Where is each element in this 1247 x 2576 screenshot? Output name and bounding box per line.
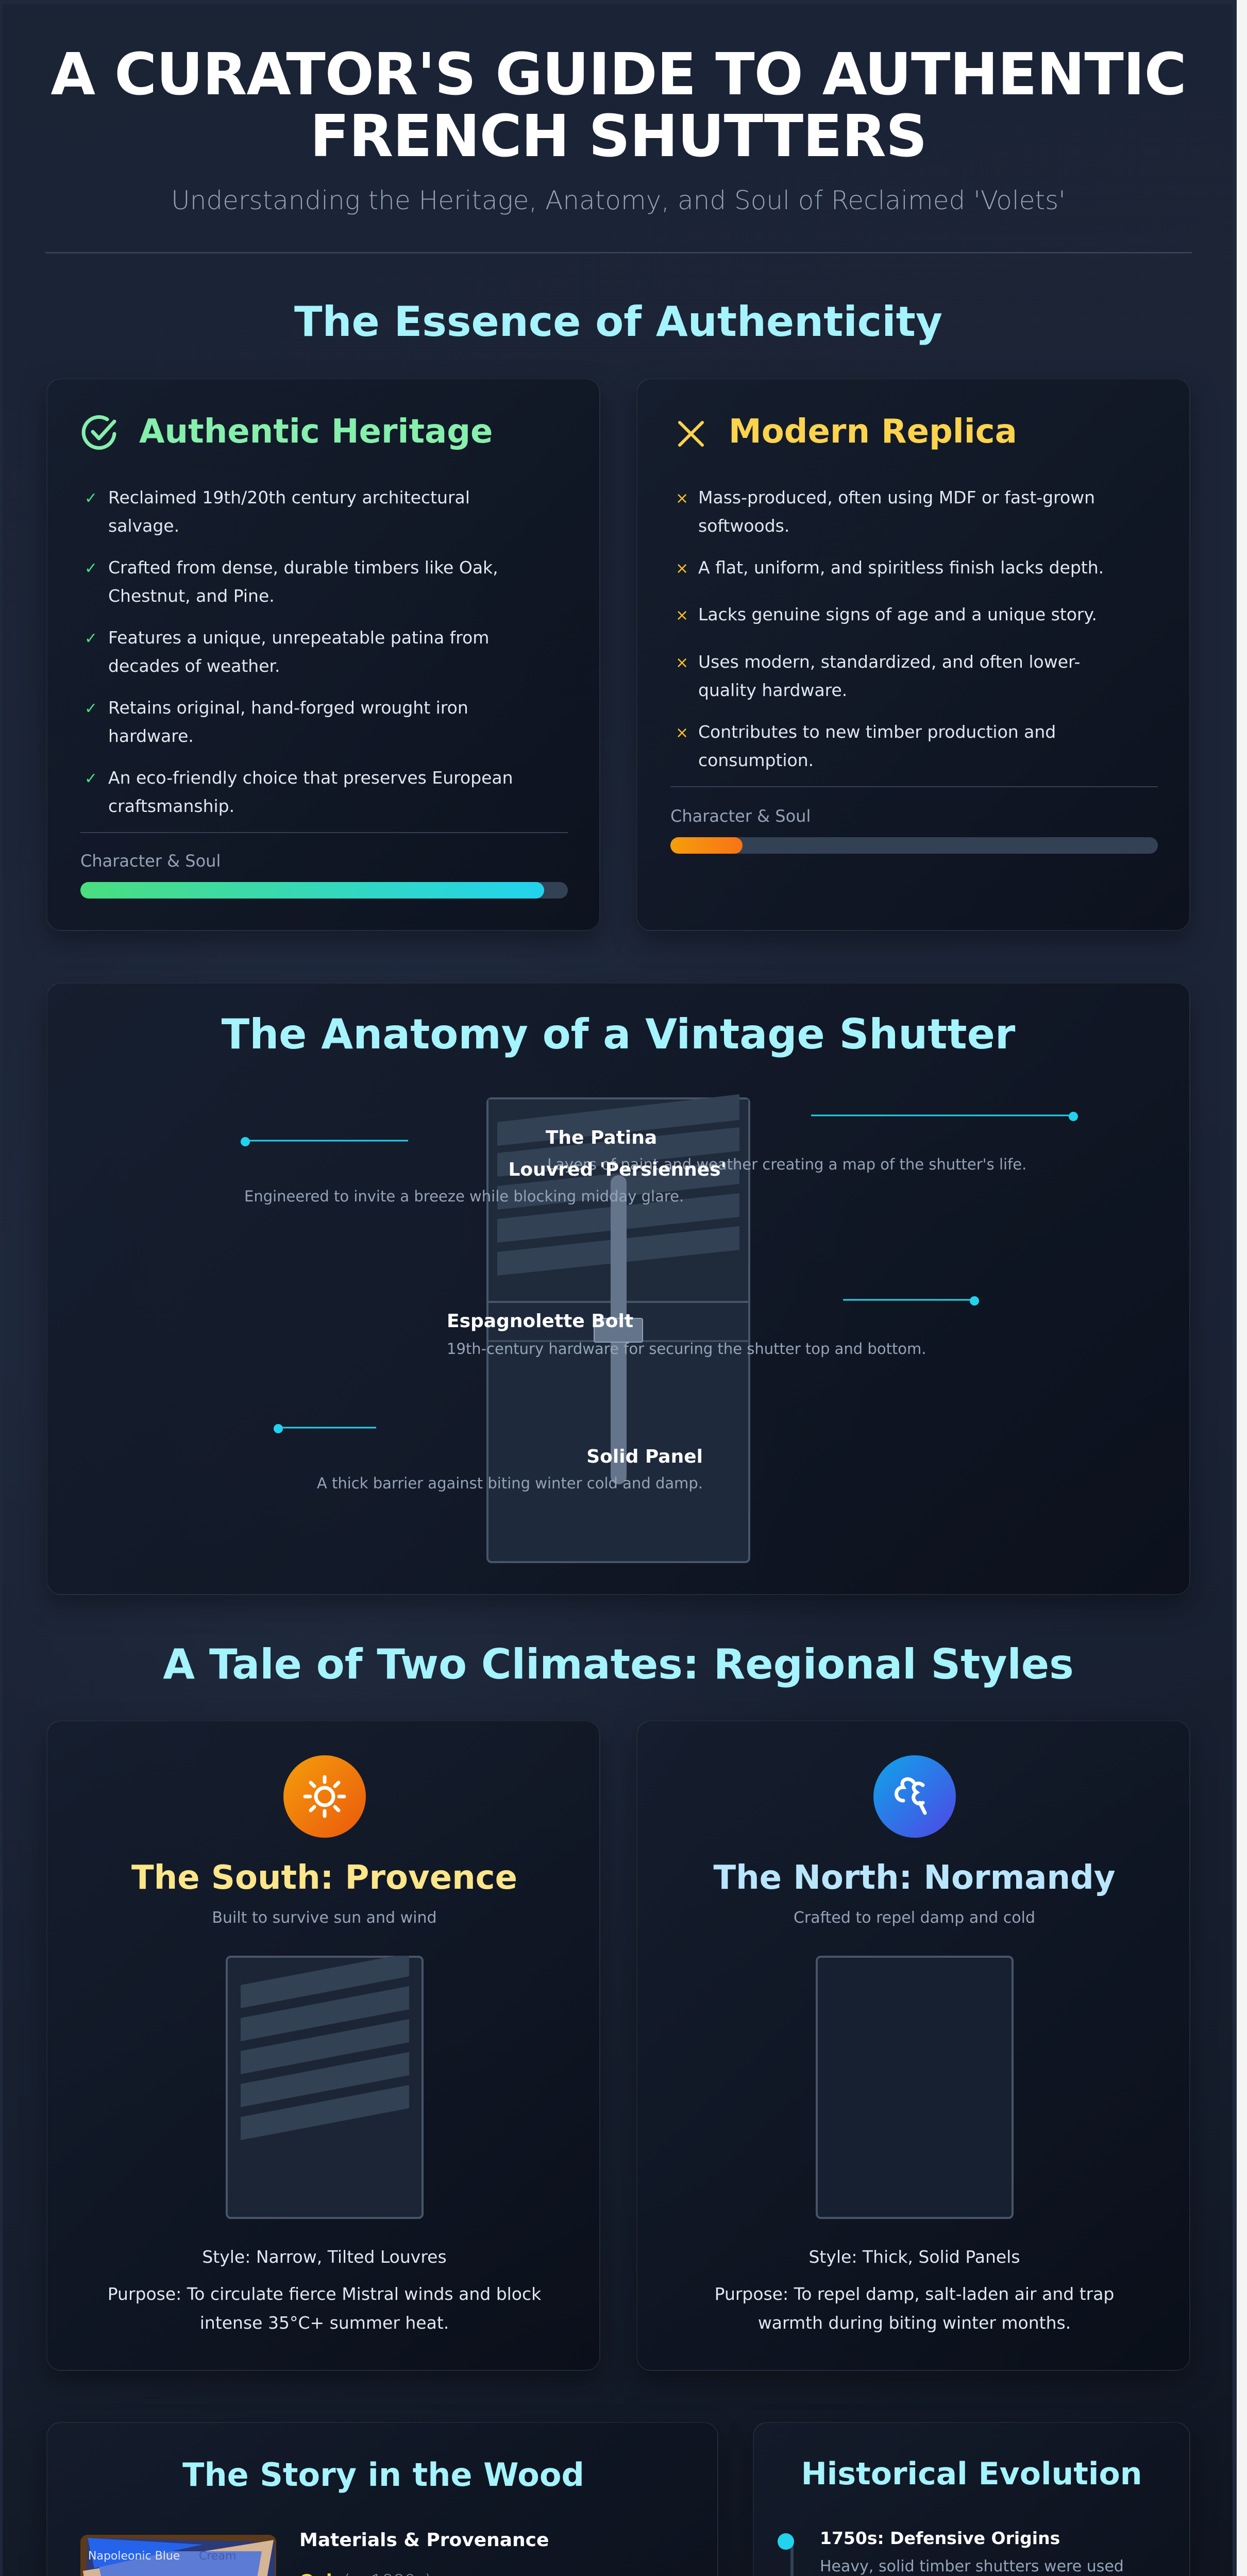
- callout: patina: The Patina: [546, 1127, 657, 1148]
- callout: louvres: Louvred 'Persiennes': [508, 1159, 727, 1180]
- panel: south provence: [46, 1720, 600, 2371]
- timeline item: 1750s: 1750s: Defensive Origins: [820, 2528, 1060, 2548]
- list: ×: [676, 606, 688, 624]
- image: paint layers: Napoleonic Blue: [88, 2550, 180, 2563]
- bar: character & soul: [80, 851, 568, 899]
- panel: authentic heritage: craftsmanship.: [108, 796, 234, 816]
- list: [676, 487, 1104, 770]
- heading: anatomy: The Anatomy of a Vintage Shutter: [222, 1010, 1015, 1058]
- list: quality hardware.: [698, 680, 847, 700]
- list: Features a unique, unrepeatable patina from: [108, 628, 489, 648]
- callout: espagnolette: Espagnolette Bolt: [447, 1311, 633, 1332]
- callout: louvres: [241, 1137, 727, 1205]
- title: [50, 41, 1186, 170]
- heading: historical evolution: Historical Evolution: [801, 2456, 1142, 2492]
- text: style: Style: Narrow, Tilted Louvres: [202, 2247, 447, 2267]
- title: FRENCH SHUTTERS: [310, 103, 927, 170]
- image: paint layers: [80, 2535, 276, 2576]
- callout: solid panel: Solid Panel: [586, 1446, 703, 1467]
- espagnolette rod: [594, 1175, 643, 1484]
- heading: The South: Provence: [131, 1859, 517, 1897]
- icon: x: [678, 421, 704, 447]
- list: ✓: [85, 700, 97, 718]
- bar: character & soul: Character & Soul: [670, 806, 811, 826]
- callout: louvres: Engineered to invite a breeze while blocking midday glare.: [244, 1188, 684, 1205]
- shutter body: [487, 1094, 749, 1562]
- title: A CURATOR'S GUIDE TO AUTHENTIC: [50, 41, 1186, 108]
- list: ×: [676, 560, 688, 578]
- heading: The North: Normandy: [713, 1859, 1116, 1897]
- list: Uses modern, standardized, and often lower-: [698, 652, 1080, 672]
- text: style: Style: Thick, Solid Panels: [808, 2247, 1020, 2267]
- list: softwoods.: [698, 516, 789, 536]
- illustration: solid shutter: [816, 1956, 1014, 2219]
- heading: Modern Replica: [729, 413, 1017, 451]
- icon: sun: [283, 1755, 366, 1838]
- list: Chestnut, and Pine.: [108, 586, 275, 606]
- heading: regional styles: A Tale of Two Climates: Regional Styles: [163, 1640, 1074, 1688]
- callout: patina: Layers of paint and weather creating a map of the shutter's life.: [547, 1156, 1026, 1173]
- list: An eco-friendly choice that preserves European: [108, 768, 513, 788]
- list: Mass-produced, often using MDF or fast-grown: [698, 487, 1095, 507]
- icon: check circle: [81, 415, 116, 450]
- text: purpose: Purpose: To repel damp, salt-laden air and trap: [715, 2284, 1114, 2304]
- text: materials: Materials & Provenance: [299, 2530, 549, 2551]
- image: paint layers: Cream: [199, 2550, 236, 2563]
- list: Reclaimed 19th/20th century architectural: [108, 487, 470, 507]
- illustration: louvred shutter: [226, 1956, 424, 2219]
- list: Lacks genuine signs of age and a unique story.: [698, 604, 1097, 624]
- list: Retains original, hand-forged wrought iron: [108, 698, 468, 718]
- list: hardware.: [108, 726, 194, 746]
- list: ×: [676, 489, 688, 507]
- panel: modern replica: [636, 378, 1190, 931]
- timeline item: 1750s: [820, 2527, 1181, 2576]
- list: ×: [676, 654, 688, 672]
- panel: anatomy: [46, 982, 1190, 1595]
- list: ✓: [85, 489, 97, 507]
- list: A flat, uniform, and spiritless finish lacks depth.: [698, 557, 1104, 578]
- list: [85, 487, 513, 816]
- panel: authentic heritage: [46, 378, 600, 931]
- list: decades of weather.: [108, 656, 280, 676]
- heading: The Story in the Wood: [182, 2456, 584, 2494]
- subtitle: Understanding the Heritage, Anatomy, and Soul of Reclaimed 'Volets': [171, 185, 1066, 215]
- subtitle: Crafted to repel damp and cold: [794, 1909, 1035, 1927]
- list: salvage.: [108, 516, 179, 536]
- panel: historical evolution: [753, 2422, 1190, 2576]
- subtitle: Built to survive sun and wind: [212, 1909, 437, 1927]
- text: purpose: warmth during biting winter months.: [758, 2313, 1071, 2333]
- text: materials: [299, 2529, 701, 2576]
- text: purpose: intense 35°C+ summer heat.: [200, 2313, 449, 2333]
- list: ×: [676, 724, 688, 742]
- diagram: shutter anatomy: [241, 1094, 1078, 1563]
- list: Crafted from dense, durable timbers like Oak,: [108, 557, 498, 578]
- callout: solid panel: [274, 1424, 703, 1492]
- callout: espagnolette: [447, 1296, 979, 1358]
- panel: story in the wood: [46, 2422, 718, 2576]
- panel: north normandy: [636, 1720, 1190, 2371]
- callout: espagnolette: 19th-century hardware for securing the shutter top and bottom.: [447, 1340, 926, 1358]
- callout: solid panel: A thick barrier against biting winter cold and damp.: [317, 1475, 703, 1492]
- heading: essence: The Essence of Authenticity: [294, 298, 942, 346]
- list: ✓: [85, 560, 97, 578]
- text: purpose: [47, 2280, 601, 2337]
- callout: patina: [546, 1112, 1078, 1173]
- timeline item: 1750s: Heavy, solid timber shutters were used: [820, 2557, 1124, 2575]
- heading: Authentic Heritage: [139, 413, 493, 451]
- list: ✓: [85, 770, 97, 788]
- icon: wind: [873, 1755, 956, 1838]
- bar: character & soul: Character & Soul: [80, 851, 221, 871]
- timeline: [773, 2524, 1185, 2576]
- text: purpose: [637, 2280, 1191, 2337]
- bar: character & soul: [670, 806, 1158, 854]
- panel: modern replica: consumption.: [698, 750, 814, 770]
- list: Contributes to new timber production and: [698, 722, 1056, 742]
- text: purpose: Purpose: To circulate fierce Mistral winds and block: [108, 2284, 541, 2304]
- list: ✓: [85, 630, 97, 648]
